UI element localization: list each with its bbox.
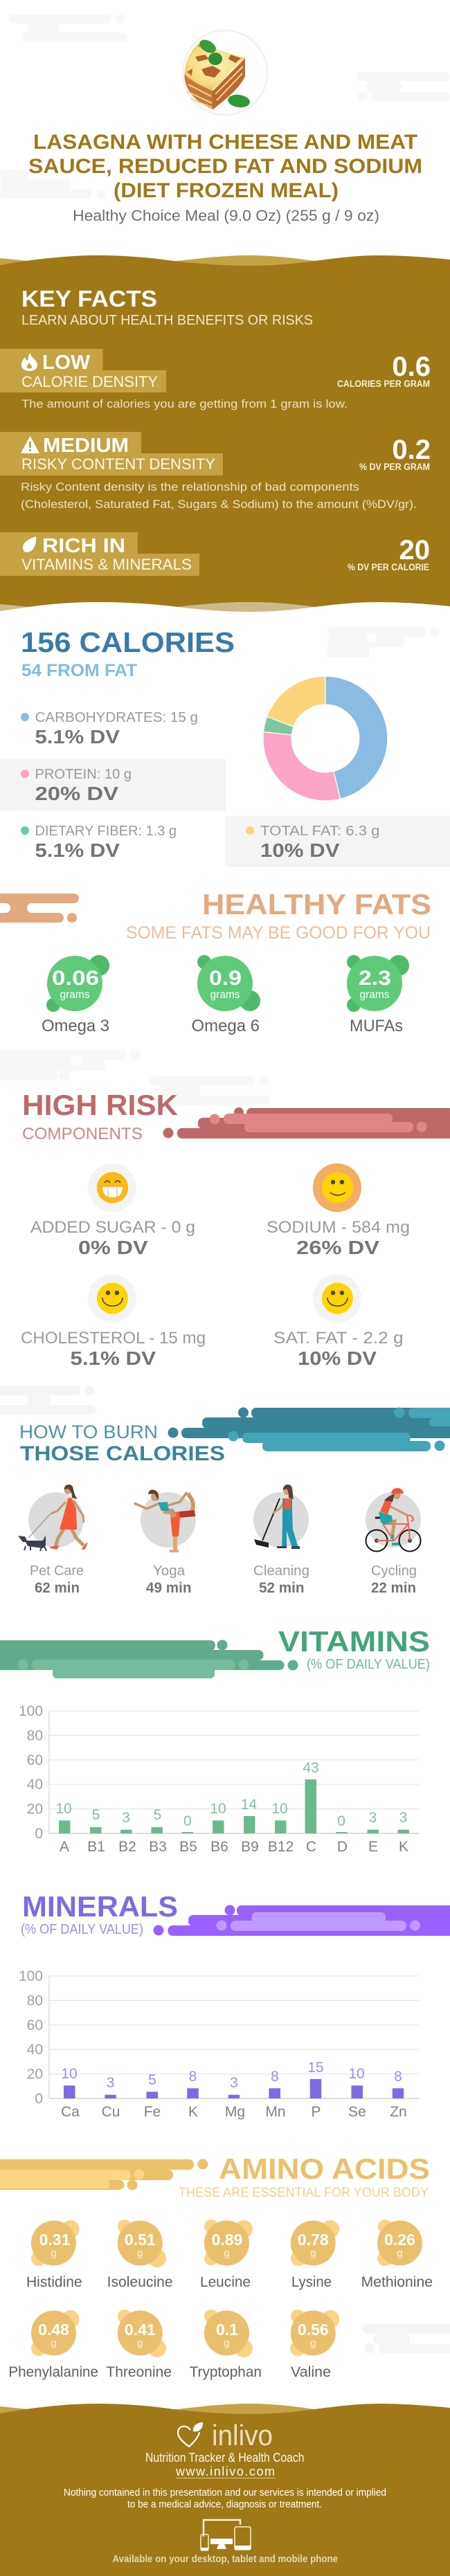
amino: threonine: 0.41 <box>125 2321 156 2339</box>
amino: valine: g <box>310 2337 316 2349</box>
bar chart: minerals: 5 <box>148 2072 156 2088</box>
bar chart: minerals: 15 <box>307 2060 324 2076</box>
amino: lysine <box>291 2220 339 2290</box>
amino: phenylalanine <box>8 2310 98 2380</box>
bar chart: minerals: 8 <box>394 2069 402 2085</box>
activity: yoga: 49 min <box>146 1580 191 1596</box>
icon: desktop, tablet and phone <box>201 2520 251 2550</box>
fact: low calorie density: The amount of calories you are getting from 1 gram is low. <box>21 398 348 410</box>
panel: vitamins <box>0 1625 430 1855</box>
bar chart: vitamins: 5 <box>154 1807 161 1823</box>
fact: low calorie density: 0.6 <box>392 352 431 382</box>
bar chart: vitamins <box>19 1703 419 1855</box>
amino: tryptophan: 0.1 <box>216 2321 238 2339</box>
panel: high risk components <box>21 1089 450 1369</box>
fat: omega 3: Omega 3 <box>42 1017 109 1035</box>
bar chart: vitamins: 0 <box>183 1813 192 1829</box>
icon: inlivo heart logo <box>178 2423 202 2447</box>
activity: cleaning: Cleaning <box>253 1563 309 1579</box>
activity: cleaning <box>253 1485 309 1596</box>
fact: low calorie density: CALORIES PER GRAM <box>337 379 430 389</box>
bottom wave of brown panel <box>0 602 314 612</box>
macro: protein: 20% DV <box>35 783 118 804</box>
bar chart: minerals: Fe <box>144 2104 161 2120</box>
macro: protein <box>0 759 226 810</box>
high risk heading: HIGH RISK <box>22 1089 178 1121</box>
activity: yoga: Yoga <box>153 1563 186 1579</box>
bar chart: minerals: Mg <box>225 2104 245 2120</box>
fat: MUFAs <box>347 955 409 1035</box>
bar chart: vitamins: 3 <box>369 1810 377 1826</box>
fact: rich in vitamins and minerals: VITAMINS & MINERALS <box>21 556 192 573</box>
amino: isoleucine: g <box>137 2247 143 2259</box>
decorative bars <box>0 894 79 923</box>
decorative clouds between sections <box>0 1049 270 1105</box>
bar chart: minerals: 100 <box>19 1968 43 1984</box>
footer wave and background <box>0 2404 450 2576</box>
key facts subheading: LEARN ABOUT HEALTH BENEFITS OR RISKS <box>21 313 313 328</box>
activity: cleaning: 52 min <box>259 1580 305 1596</box>
activity: pet care: Pet Care <box>30 1563 84 1579</box>
bar chart: vitamins: B5 <box>179 1839 197 1855</box>
risk: sodium <box>267 1163 410 1258</box>
healthy fats heading: HEALTHY FATS <box>202 888 431 920</box>
panel: minerals <box>19 1890 450 2120</box>
bar chart: vitamins: B2 <box>118 1839 136 1855</box>
panel: how to burn those calories <box>0 1386 450 1596</box>
disclaimer <box>64 2487 386 2510</box>
decorative header background clouds <box>0 14 450 199</box>
bar chart: minerals: Se <box>348 2104 366 2120</box>
fact: rich in vitamins and minerals <box>0 532 430 576</box>
activity: yoga <box>134 1489 196 1596</box>
decorative bars <box>0 2159 208 2190</box>
macro: dietary fiber: DIETARY FIBER: 1.3 g <box>35 824 177 839</box>
bar chart: minerals: 10 <box>348 2066 365 2082</box>
panel: footer <box>0 2404 450 2576</box>
bar chart: vitamins: 3 <box>399 1810 407 1826</box>
title: (DIET FROZEN MEAL) <box>114 179 339 202</box>
bar chart: vitamins: 20 <box>27 1802 43 1817</box>
fact: medium risky content density: 0.2 <box>392 435 431 465</box>
macro: carbohydrates <box>21 710 198 747</box>
risk: added sugar: 0% DV <box>78 1237 148 1258</box>
amino acids heading: AMINO ACIDS <box>219 2152 430 2185</box>
bar chart: minerals: 80 <box>27 1993 43 2008</box>
bar chart: vitamins: 100 <box>19 1703 43 1719</box>
amino: valine <box>290 2310 339 2380</box>
healthy fats subheading: SOME FATS MAY BE GOOD FOR YOU <box>126 923 431 943</box>
macro: dietary fiber: 5.1% DV <box>35 840 120 861</box>
amino: lysine: Lysine <box>291 2274 332 2290</box>
title: SAUCE, REDUCED FAT AND SODIUM <box>28 155 422 178</box>
activity: cycling <box>366 1488 421 1596</box>
bar chart: minerals: P <box>311 2104 321 2120</box>
vitamins subheading: (% OF DAILY VALUE) <box>307 1657 430 1672</box>
decorative bars <box>154 1905 450 1936</box>
bar chart: vitamins: 0 <box>35 1826 43 1842</box>
fat: MUFAs: MUFAs <box>350 1017 403 1035</box>
icon: grinning face <box>97 1172 128 1203</box>
bar chart: vitamins: B1 <box>87 1839 105 1855</box>
vitamins heading: VITAMINS <box>278 1625 430 1658</box>
disclaimer: Nothing contained in this presentation and our services is intended or implied <box>64 2487 386 2498</box>
amino: methionine: Methionine <box>361 2274 433 2290</box>
calories heading: 156 CALORIES <box>21 626 235 658</box>
risk: added sugar: ADDED SUGAR - 0 g <box>30 1218 195 1237</box>
amino: leucine: Leucine <box>200 2274 251 2290</box>
amino: leucine <box>200 2220 253 2290</box>
bar chart: minerals: Mn <box>265 2104 286 2120</box>
risk: added sugar <box>30 1163 195 1258</box>
macro: protein: PROTEIN: 10 g <box>35 767 132 782</box>
bar chart: minerals: 40 <box>27 2042 43 2058</box>
title <box>28 131 422 202</box>
risk: cholesterol: 5.1% DV <box>71 1348 156 1369</box>
fact: low calorie density: CALORIE DENSITY <box>21 373 158 390</box>
bar chart: minerals: 3 <box>230 2075 238 2091</box>
amino: threonine <box>106 2310 172 2380</box>
fact: low calorie density: LOW <box>42 352 91 374</box>
bar chart: minerals: 3 <box>107 2075 114 2091</box>
macro: total fat <box>225 816 450 867</box>
bar chart: vitamins: 10 <box>55 1801 72 1817</box>
bar chart: vitamins: 60 <box>27 1752 43 1768</box>
heading line one: HOW TO BURN <box>19 1422 158 1442</box>
risk: saturated fat: 10% DV <box>298 1348 377 1369</box>
fact: medium risky content density <box>0 432 431 511</box>
bar chart: vitamins: 3 <box>122 1810 130 1826</box>
icon: woman on bicycle <box>366 1488 421 1552</box>
bar chart: vitamins: 40 <box>27 1777 43 1793</box>
icon: flame <box>21 353 37 371</box>
risk: cholesterol <box>21 1274 206 1369</box>
fat: omega 3: grams <box>60 989 90 1001</box>
decorative bars <box>168 1408 450 1451</box>
fat: omega 6: 0.9 <box>209 967 242 990</box>
bar chart: vitamins: 80 <box>27 1727 43 1743</box>
icon: leaf <box>23 536 36 552</box>
amino: lysine: 0.78 <box>298 2231 329 2249</box>
risk: saturated fat: SAT. FAT - 2.2 g <box>273 1329 403 1348</box>
bar chart: minerals: Zn <box>390 2104 407 2120</box>
amino: lysine: g <box>310 2247 316 2259</box>
amino: phenylalanine: Phenylalanine <box>8 2364 98 2380</box>
icon: warning triangle <box>21 436 39 453</box>
amino: isoleucine: Isoleucine <box>107 2274 173 2290</box>
amino acids subheading: THESE ARE ESSENTIAL FOR YOUR BODY <box>179 2185 429 2200</box>
bar chart: minerals: 8 <box>271 2069 279 2085</box>
risk: cholesterol: CHOLESTEROL - 15 mg <box>21 1329 206 1348</box>
fat: omega 6 <box>191 955 260 1035</box>
bar chart: vitamins: 10 <box>210 1801 226 1817</box>
panel: calories <box>0 626 450 867</box>
amino: histidine: g <box>51 2247 57 2259</box>
title: LASAGNA WITH CHEESE AND MEAT <box>33 131 417 154</box>
decorative bars <box>0 1640 298 1678</box>
risk: sodium: 26% DV <box>296 1237 379 1258</box>
bar chart: vitamins: 43 <box>303 1760 319 1776</box>
bar chart: minerals: 0 <box>35 2091 43 2107</box>
fact: medium risky content density: MEDIUM <box>43 435 129 457</box>
key facts heading: KEY FACTS <box>21 286 157 311</box>
bar chart: vitamins: D <box>337 1839 348 1855</box>
bar chart: vitamins: K <box>399 1839 408 1855</box>
amino: isoleucine <box>107 2220 173 2290</box>
amino: methionine: g <box>397 2247 403 2259</box>
high risk subheading: COMPONENTS <box>22 1125 143 1143</box>
amino: isoleucine: 0.51 <box>125 2231 156 2249</box>
amino: methionine: 0.26 <box>384 2231 415 2249</box>
subtitle: serving size: Healthy Choice Meal (9.0 Oz) (255 g / 9 oz) <box>73 207 379 224</box>
icon: smiling face <box>322 1283 353 1314</box>
amino: leucine: 0.89 <box>212 2231 242 2249</box>
amino: tryptophan: Tryptophan <box>190 2364 262 2380</box>
calories from fat: 54 FROM FAT <box>21 661 137 680</box>
website link: www.inlivo.com <box>175 2465 275 2478</box>
risk: saturated fat <box>273 1274 403 1369</box>
fat: omega 6: grams <box>210 989 240 1001</box>
bar chart: vitamins: B12 <box>268 1839 294 1855</box>
macro: dietary fiber <box>21 824 177 861</box>
amino: phenylalanine: 0.48 <box>38 2321 69 2339</box>
icon: smiling face <box>97 1283 128 1314</box>
fact: medium risky content density: RISKY CONTENT DENSITY <box>21 455 215 473</box>
donut chart: macronutrients <box>263 676 388 801</box>
risk: sodium: SODIUM - 584 mg <box>267 1218 410 1237</box>
decorative cloud <box>363 2324 450 2353</box>
fat: MUFAs: 2.3 <box>359 967 391 990</box>
fat: omega 3 <box>42 955 109 1035</box>
bar chart: minerals: 20 <box>27 2067 43 2083</box>
panel: key facts <box>0 255 450 612</box>
amino: methionine <box>361 2220 433 2290</box>
fact: low calorie density <box>0 349 431 410</box>
bar chart: minerals: 8 <box>189 2069 197 2085</box>
bar chart: minerals: K <box>188 2104 198 2120</box>
macro: carbohydrates: CARBOHYDRATES: 15 g <box>35 710 198 725</box>
fat: omega 6: Omega 6 <box>191 1017 260 1035</box>
activity: pet care: 62 min <box>35 1580 80 1596</box>
amino: tryptophan: g <box>224 2337 230 2349</box>
brand name: inlivo <box>212 2419 273 2451</box>
activity: pet care <box>18 1485 87 1596</box>
bar chart: minerals: 60 <box>27 2017 43 2033</box>
fact: medium risky content density: Risky Content density is the relationship of bad components <box>21 481 359 493</box>
amino: leucine: g <box>224 2247 230 2259</box>
fact: medium risky content density: % DV PER GRAM <box>359 462 430 472</box>
panel: healthy fats <box>0 888 431 1035</box>
minerals subheading: (% OF DAILY VALUE) <box>21 1922 143 1937</box>
fact: rich in vitamins and minerals: % DV PER CALORIE <box>348 562 429 572</box>
icon: smiling face <box>322 1172 353 1203</box>
fat: MUFAs: grams <box>359 989 390 1001</box>
bar chart: vitamins: 5 <box>92 1807 100 1823</box>
amino: phenylalanine: g <box>51 2337 57 2349</box>
decorative cloud <box>0 1386 96 1415</box>
bar chart: minerals: 10 <box>61 2066 78 2082</box>
amino: tryptophan <box>190 2310 262 2380</box>
bar chart: minerals: Cu <box>102 2104 120 2120</box>
minerals heading: MINERALS <box>22 1890 178 1923</box>
bar chart: minerals: Ca <box>61 2104 80 2120</box>
macro: carbohydrates: 5.1% DV <box>35 726 120 747</box>
amino: histidine <box>26 2220 82 2290</box>
amino: valine: 0.56 <box>298 2321 329 2339</box>
panel: amino acids <box>0 2152 450 2380</box>
activity: cycling: Cycling <box>371 1563 417 1579</box>
bar chart: vitamins: A <box>60 1839 69 1855</box>
icon: woman walking dog <box>18 1485 87 1551</box>
icon: woman sweeping <box>254 1485 300 1549</box>
bar chart: vitamins: B6 <box>210 1839 228 1855</box>
macro: total fat: TOTAL FAT: 6.3 g <box>260 824 379 839</box>
tagline: Nutrition Tracker & Health Coach <box>145 2451 305 2465</box>
heading line two: THOSE CALORIES <box>20 1442 225 1465</box>
amino: histidine: 0.31 <box>39 2231 71 2249</box>
bar chart: vitamins: B3 <box>149 1839 167 1855</box>
icon: woman in yoga pose <box>134 1489 195 1552</box>
bar chart: vitamins: E <box>368 1839 378 1855</box>
activity: cycling: 22 min <box>371 1580 416 1596</box>
bar chart: vitamins: 14 <box>241 1797 257 1813</box>
fat: omega 3: 0.06 <box>52 967 99 990</box>
fact: rich in vitamins and minerals: 20 <box>399 535 430 565</box>
bar chart: vitamins: C <box>306 1839 316 1855</box>
bar chart: minerals <box>19 1968 419 2120</box>
amino: threonine: Threonine <box>106 2364 172 2380</box>
bar chart: vitamins: B9 <box>241 1839 259 1855</box>
top wave of brown panel <box>0 255 314 277</box>
bar chart: vitamins: 0 <box>337 1813 345 1829</box>
disclaimer: to be a medical advice, diagnosis or treatment. <box>127 2499 322 2510</box>
icon: lasagna photo in circle <box>183 30 267 115</box>
decorative cloud <box>327 627 440 657</box>
macro: total fat: 10% DV <box>260 840 340 861</box>
availability note: Available on your desktop, tablet and mobile phone <box>112 2554 338 2565</box>
decorative bars <box>163 1107 450 1139</box>
amino: valine: Valine <box>291 2364 331 2380</box>
fact: medium risky content density: (Cholesterol, Saturated Fat, Sugars & Sodium) to the amount (%DV/gr). <box>21 498 417 511</box>
amino: threonine: g <box>137 2337 143 2349</box>
amino: histidine: Histidine <box>26 2274 82 2290</box>
fact: rich in vitamins and minerals: RICH IN <box>42 535 125 557</box>
bar chart: vitamins: 10 <box>271 1801 288 1817</box>
